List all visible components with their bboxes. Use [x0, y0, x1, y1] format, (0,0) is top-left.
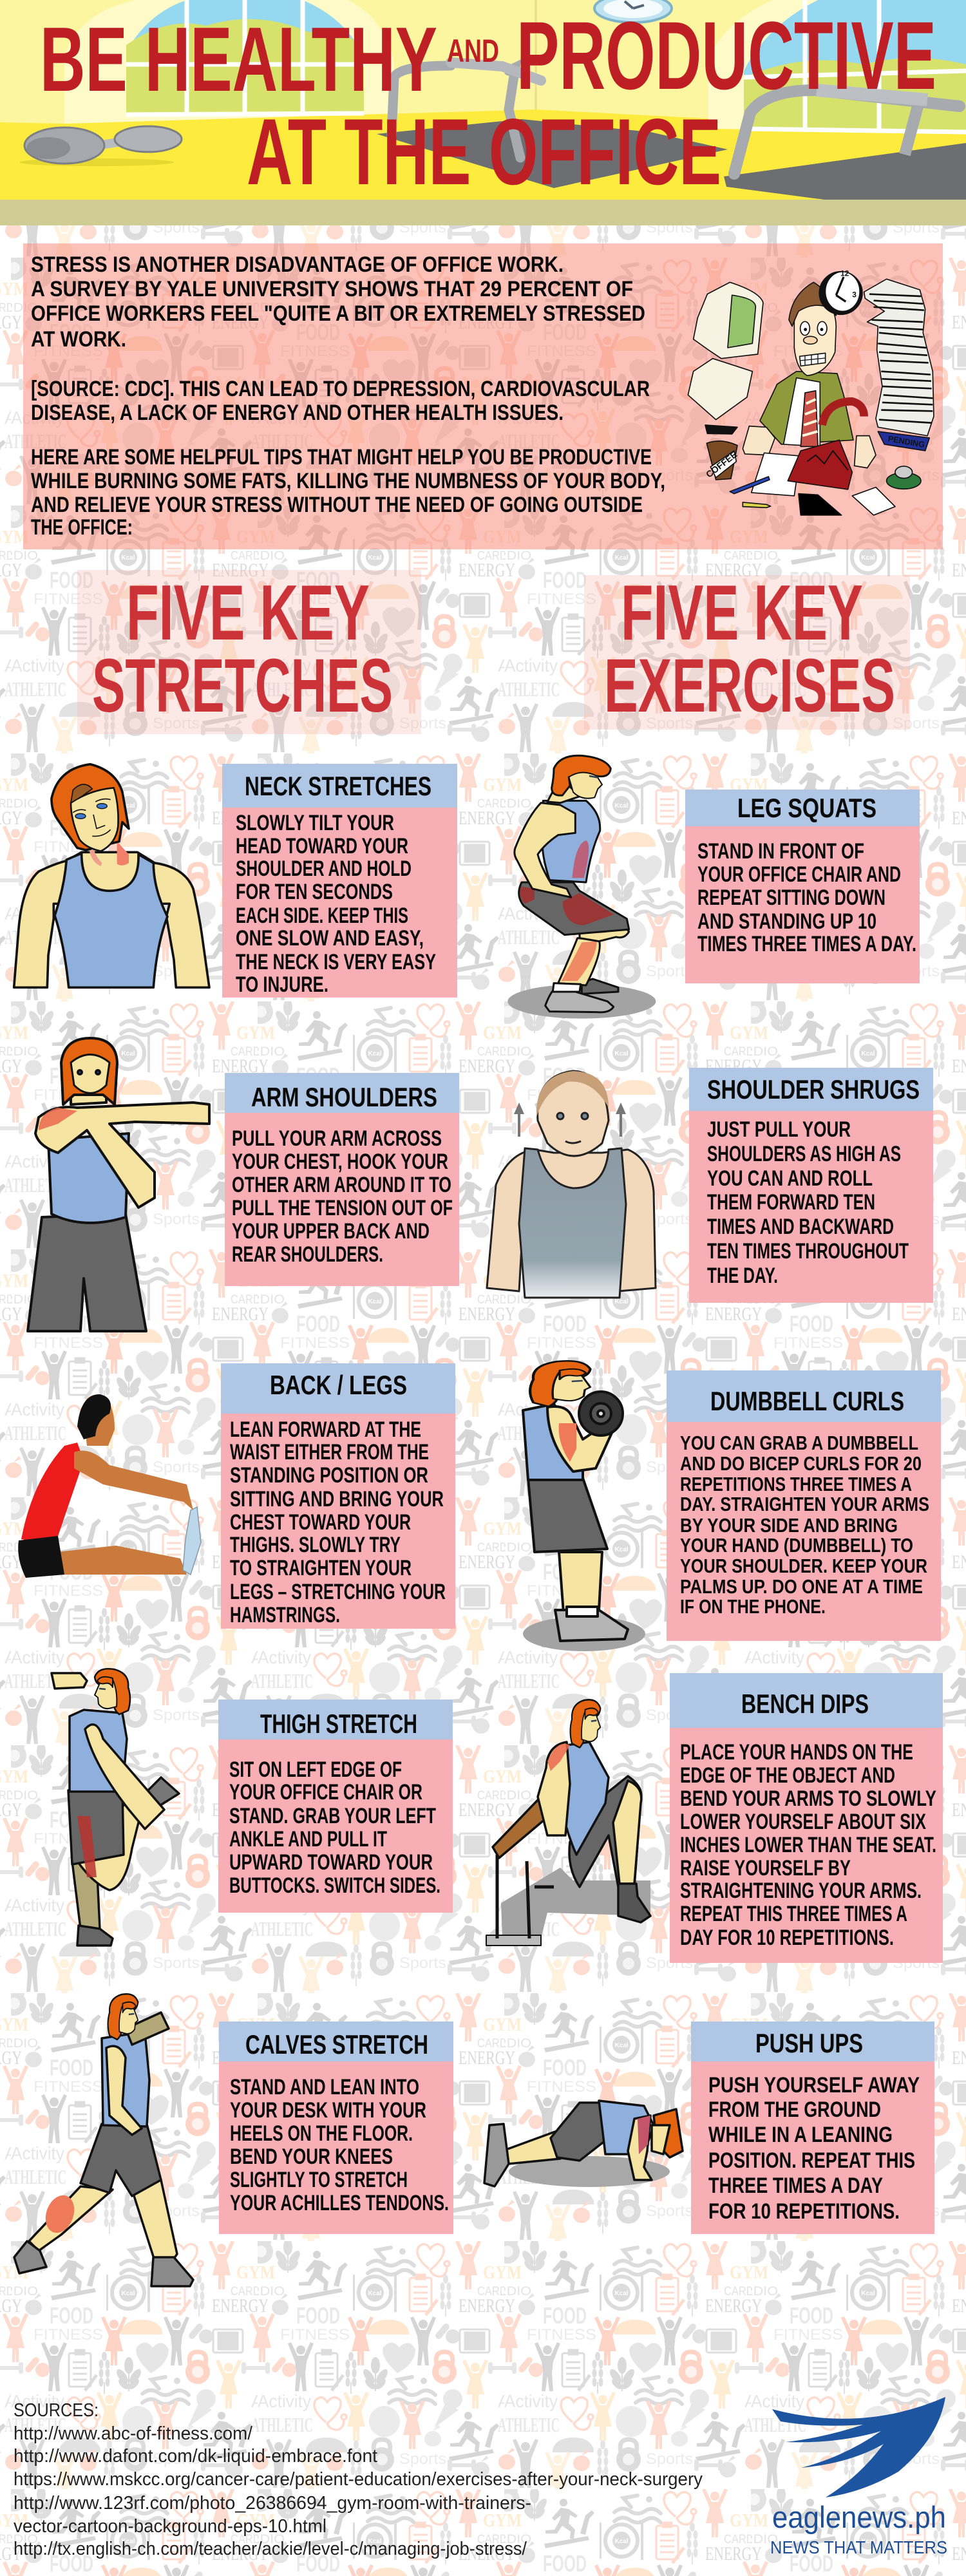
intro text: STRESS IS ANOTHER DISADVANTAGE OF OFFICE WORK. — [31, 252, 564, 277]
card: shoulder shrugs: THE DAY. — [707, 1264, 778, 1288]
panel: five key stretches heading: FIVE KEY — [126, 569, 370, 656]
icon: wall clock — [594, 0, 672, 23]
card: arm shoulders: REAR SHOULDERS. — [232, 1242, 383, 1267]
card: push ups: FOR 10 REPETITIONS. — [708, 2199, 900, 2224]
card: arm shoulders: YOUR CHEST, HOOK YOUR — [232, 1150, 448, 1174]
card: calves stretch: YOUR ACHILLES TENDONS. — [230, 2191, 449, 2215]
card: dumbbell curls: PALMS UP. DO ONE AT A TIME — [680, 1575, 923, 1598]
figure: seated hamstring stretch — [18, 1394, 201, 1578]
illustration: stressed office worker: 3 — [852, 290, 857, 299]
intro text: OFFICE WORKERS FEEL "QUITE A BIT OR EXTREMELY STRESSED — [31, 301, 645, 326]
card: neck stretches: TO INJURE. — [236, 972, 328, 997]
card: arm shoulders: PULL YOUR ARM ACROSS — [232, 1126, 442, 1151]
card: dumbbell curls: AND DO BICEP CURLS FOR 20 — [680, 1452, 922, 1475]
card: bench dips: DAY FOR 10 REPETITIONS. — [680, 1926, 894, 1950]
card: neck stretches: FOR TEN SECONDS — [236, 880, 393, 904]
panel: five key exercises heading — [584, 569, 910, 730]
card: calves stretch: CALVES STRETCH — [245, 2029, 428, 2060]
card: calves stretch: BEND YOUR KNEES — [230, 2145, 393, 2169]
card: neck stretches: NECK STRETCHES — [245, 771, 431, 801]
card: push ups: PUSH UPS — [755, 2028, 863, 2058]
card: arm shoulders: YOUR UPPER BACK AND — [232, 1219, 430, 1244]
logo: eaglenews.ph: NEWS THAT MATTERS — [770, 2537, 947, 2557]
sources list — [14, 2400, 703, 2559]
intro text: DISEASE, A LACK OF ENERGY AND OTHER HEALTH ISSUES. — [31, 401, 564, 425]
card: thigh stretch — [218, 1700, 453, 1913]
card: bench dips: RAISE YOURSELF BY — [680, 1856, 851, 1880]
sources list: https://www.mskcc.org/cancer-care/patient-education/exercises-after-your-neck-surgery — [14, 2469, 703, 2490]
intro text — [31, 252, 665, 540]
card: back / legs — [221, 1363, 455, 1629]
illustration: stressed office worker — [688, 269, 934, 515]
figure: shoulder shrug — [487, 1071, 656, 1298]
card: arm shoulders: PULL THE TENSION OUT OF — [232, 1196, 453, 1220]
figure: neck stretch — [14, 764, 209, 987]
illustration: stressed office worker: COFFEE — [704, 449, 739, 480]
card: dumbbell curls: DUMBBELL CURLS — [710, 1386, 904, 1416]
card: back / legs: CHEST TOWARD YOUR — [230, 1510, 411, 1535]
card: shoulder shrugs: YOU CAN AND ROLL — [707, 1166, 873, 1191]
intro text: THE OFFICE: — [31, 515, 133, 540]
card: back / legs: LEGS – STRETCHING YOUR — [230, 1580, 446, 1604]
card: neck stretches: HEAD TOWARD YOUR — [236, 834, 408, 858]
figure: leg squat — [507, 755, 656, 1019]
card: leg squats: STAND IN FRONT OF — [697, 839, 864, 864]
card: back / legs: TO STRAIGHTEN YOUR — [230, 1556, 412, 1580]
intro text: WHILE BURNING SOME FATS, KILLING THE NUMBNESS OF YOUR BODY, — [31, 469, 665, 493]
card: leg squats: LEG SQUATS — [737, 793, 876, 823]
card: arm shoulders: OTHER ARM AROUND IT TO — [232, 1173, 451, 1197]
card: neck stretches: SHOULDER AND HOLD — [236, 857, 412, 881]
card: neck stretches: ONE SLOW AND EASY, — [236, 926, 424, 951]
card: dumbbell curls: BY YOUR SIDE AND BRING — [680, 1514, 898, 1537]
card: dumbbell curls: REPETITIONS THREE TIMES A — [680, 1473, 912, 1495]
card: back / legs: STANDING POSITION OR — [230, 1463, 428, 1488]
header illustration: gym room — [0, 0, 966, 200]
panel: stress introduction — [23, 243, 943, 549]
card: arm shoulders: ARM SHOULDERS — [251, 1082, 437, 1112]
card: leg squats — [685, 790, 920, 983]
sources list: vector-cartoon-background-eps-10.html — [14, 2516, 327, 2537]
card: thigh stretch: THIGH STRETCH — [260, 1709, 417, 1739]
card: thigh stretch: ANKLE AND PULL IT — [229, 1827, 387, 1852]
card: push ups: PUSH YOURSELF AWAY — [708, 2073, 920, 2098]
card: calves stretch — [219, 2022, 453, 2234]
card: arm shoulders — [225, 1073, 459, 1286]
sources list: SOURCES: — [14, 2400, 99, 2421]
card: calves stretch: YOUR DESK WITH YOUR — [230, 2098, 426, 2123]
icon: up arrows — [514, 1103, 626, 1137]
card: push ups: FROM THE GROUND — [708, 2098, 881, 2122]
card: leg squats: AND STANDING UP 10 — [697, 909, 876, 934]
intro text: A SURVEY BY YALE UNIVERSITY SHOWS THAT 29 PERCENT OF — [31, 277, 633, 301]
card: back / legs: THIGHS. SLOWLY TRY — [230, 1533, 401, 1557]
logo: eaglenews.ph — [770, 2397, 947, 2557]
card: push ups: POSITION. REPEAT THIS — [708, 2148, 915, 2173]
logo: eaglenews.ph: eaglenews.ph — [772, 2500, 946, 2534]
icon: eagle wing — [772, 2397, 945, 2497]
card: dumbbell curls — [667, 1370, 941, 1641]
figure: dumbbell curl — [523, 1361, 645, 1651]
card: dumbbell curls: IF ON THE PHONE. — [680, 1595, 826, 1618]
sources list: http://www.dafont.com/dk-liquid-embrace.font — [14, 2446, 377, 2467]
card: shoulder shrugs: THEM FORWARD TEN — [707, 1190, 875, 1215]
card: shoulder shrugs: JUST PULL YOUR — [707, 1117, 851, 1142]
card: back / legs: WAIST EITHER FROM THE — [230, 1440, 429, 1464]
title: BE HEALTHY — [40, 8, 437, 111]
intro text: [SOURCE: CDC]. THIS CAN LEAD TO DEPRESSION, CARDIOVASCULAR — [31, 377, 650, 401]
illustration: stressed office worker: PENDING — [887, 434, 925, 450]
illustration: stressed office worker: 12 — [840, 269, 849, 278]
figure: thigh stretch — [52, 1669, 179, 1946]
card: thigh stretch: STAND. GRAB YOUR LEFT — [229, 1804, 436, 1828]
figure: calves stretch — [14, 1994, 193, 2286]
card: push ups — [691, 2022, 934, 2234]
card: thigh stretch: YOUR OFFICE CHAIR OR — [229, 1780, 422, 1804]
intro text: AT WORK. — [31, 327, 126, 352]
sources list: http://www.abc-of-fitness.com/ — [14, 2423, 253, 2444]
card: thigh stretch: BUTTOCKS. SWITCH SIDES. — [229, 1873, 440, 1898]
card: neck stretches — [222, 764, 457, 998]
card: shoulder shrugs — [689, 1068, 933, 1303]
card: push ups: THREE TIMES A DAY — [708, 2174, 883, 2198]
figure: bench dips — [486, 1700, 650, 1946]
title: AND — [447, 33, 499, 69]
card: shoulder shrugs: TIMES AND BACKWARD — [707, 1215, 894, 1239]
panel: five key stretches heading — [77, 569, 421, 734]
figure: push up — [484, 2101, 683, 2187]
olive band — [0, 200, 966, 225]
card: thigh stretch: UPWARD TOWARD YOUR — [229, 1850, 433, 1875]
sources list: http://www.123rf.com/photo_26386694_gym-room-with-trainers- — [14, 2493, 531, 2514]
card: back / legs: LEAN FORWARD AT THE — [230, 1417, 421, 1442]
icon: right treadmill — [724, 90, 966, 200]
card: dumbbell curls: YOUR HAND (DUMBBELL) TO — [680, 1534, 913, 1557]
intro text: AND RELIEVE YOUR STRESS WITHOUT THE NEED OF GOING OUTSIDE — [31, 493, 643, 517]
sources list: http://tx.english-ch.com/teacher/ackie/level-c/managing-job-stress/ — [14, 2539, 527, 2559]
title — [40, 1, 936, 204]
card: calves stretch: SLIGHTLY TO STRETCH — [230, 2168, 408, 2192]
card: calves stretch: STAND AND LEAN INTO — [230, 2075, 419, 2099]
card: calves stretch: HEELS ON THE FLOOR. — [230, 2121, 413, 2146]
card: dumbbell curls: YOU CAN GRAB A DUMBBELL — [680, 1432, 918, 1454]
card: leg squats: REPEAT SITTING DOWN — [697, 886, 886, 910]
card: back / legs: HAMSTRINGS. — [230, 1603, 340, 1627]
card: neck stretches: THE NECK IS VERY EASY — [236, 950, 436, 974]
card: bench dips: BENCH DIPS — [741, 1689, 869, 1719]
icon: centre treadmill — [377, 62, 728, 188]
card: bench dips — [670, 1673, 943, 1963]
icon: dumbbell — [19, 126, 182, 166]
figure: arm shoulder stretch — [28, 1038, 209, 1331]
card: thigh stretch: SIT ON LEFT EDGE OF — [229, 1757, 402, 1782]
card: neck stretches: SLOWLY TILT YOUR — [236, 811, 394, 835]
title: AT THE OFFICE — [247, 99, 721, 204]
card: back / legs: SITTING AND BRING YOUR — [230, 1487, 444, 1511]
panel: five key stretches heading: STRETCHES — [92, 643, 393, 728]
card: neck stretches: EACH SIDE. KEEP THIS — [236, 904, 408, 928]
intro text: HERE ARE SOME HELPFUL TIPS THAT MIGHT HELP YOU BE PRODUCTIVE — [31, 445, 652, 469]
card: push ups: WHILE IN A LEANING — [708, 2123, 893, 2147]
card: back / legs: BACK / LEGS — [270, 1370, 407, 1400]
